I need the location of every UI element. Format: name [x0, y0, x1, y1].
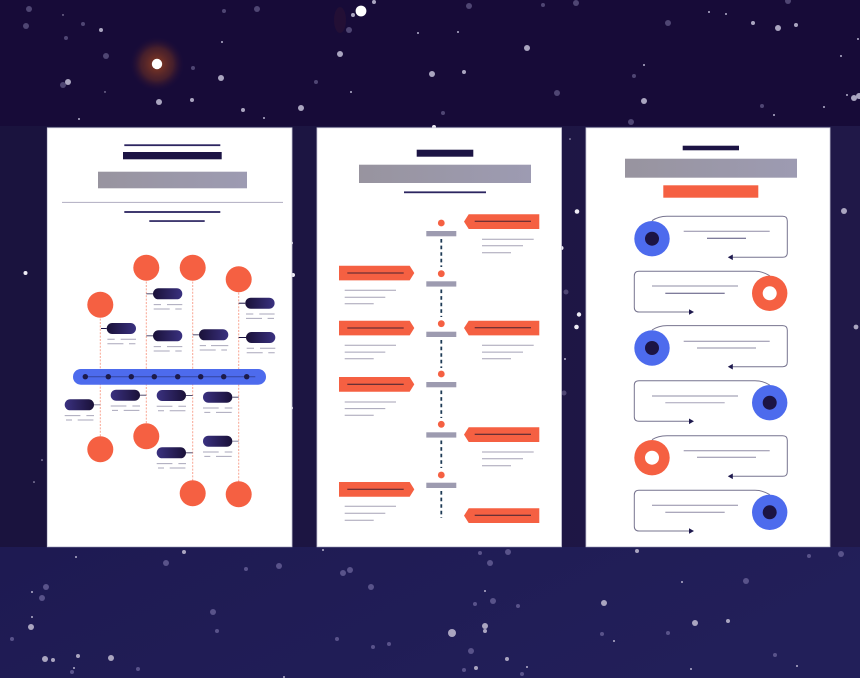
lower labels	[65, 390, 239, 468]
step 4	[634, 381, 787, 424]
glowing orange star	[130, 6, 366, 91]
dashed connectors	[100, 268, 239, 494]
orange circles	[87, 255, 252, 507]
left tags	[339, 266, 414, 520]
panel 3: process steps	[586, 128, 830, 547]
step 3	[634, 326, 787, 370]
panel 3 sheet	[586, 128, 830, 547]
upper labels	[101, 288, 275, 353]
step 5	[634, 436, 787, 479]
panel 3 heading	[625, 146, 797, 198]
step 2	[634, 271, 787, 315]
timeline nodes	[426, 220, 456, 488]
step 1	[634, 216, 787, 260]
right tags	[464, 214, 539, 523]
panel 2 sheet	[317, 128, 562, 547]
panel 2: vertical timeline	[317, 128, 562, 547]
panel 1 sheet	[47, 128, 292, 547]
stars: white in gutters	[24, 125, 581, 410]
dashed spine	[440, 239, 442, 518]
step 6	[634, 490, 787, 534]
blue timeline bar	[73, 369, 266, 385]
panel 1 heading	[62, 144, 283, 222]
panel 2 heading	[359, 150, 531, 193]
panel 1: horizontal timeline	[47, 128, 292, 547]
